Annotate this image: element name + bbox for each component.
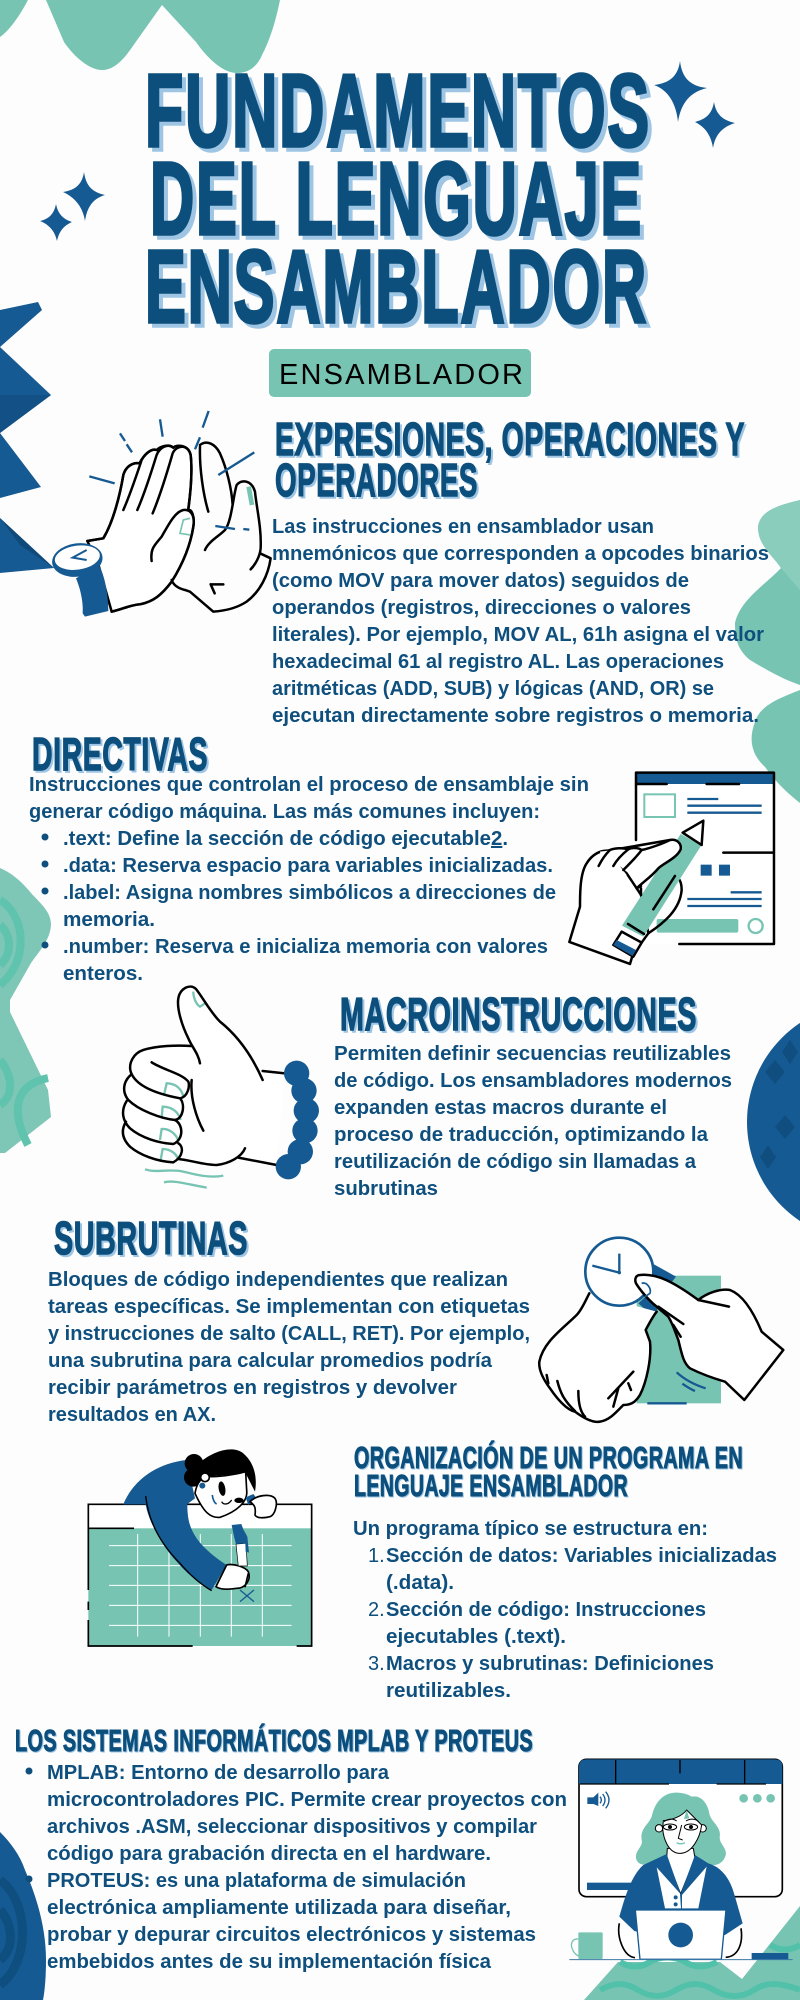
text block: organizacion: 1. — [368, 1545, 385, 1567]
icon: person marking calendar — [88, 1449, 312, 1646]
text block: subrutinas — [48, 1269, 530, 1426]
text block: mplab y proteus: embebidos antes de su implementación física — [47, 1951, 492, 1973]
text block: organizacion: (.data). — [386, 1572, 454, 1594]
heading: expresiones: OPERADORES — [275, 454, 478, 506]
decorative shape: bottom left blue — [0, 1832, 46, 2000]
title — [145, 53, 651, 344]
panel: mplab y proteus — [15, 1723, 793, 1973]
text block: expresiones: hexadecimal 61 al registro AL. Las operaciones — [272, 651, 724, 673]
decorative blob: top teal — [0, 0, 280, 73]
text block: expresiones: mnemónicos que corresponden a opcodes binarios — [272, 543, 769, 565]
badge: ensamblador: ENSAMBLADOR — [279, 359, 523, 391]
text block: expresiones: literales). Por ejemplo, MOV AL, 61h asigna el valor — [272, 624, 764, 646]
text block: mplab y proteus — [26, 1762, 567, 1973]
text block: directivas: Instrucciones que controlan el proceso de ensamblaje sin — [29, 774, 589, 796]
text block: subrutinas: recibir parámetros en registros y devolver — [48, 1377, 457, 1399]
text block: mplab y proteus: código para grabación directa en el hardware. — [47, 1843, 491, 1865]
heading: directivas: DIRECTIVAS — [32, 728, 208, 780]
icon: hand with pencil on document — [569, 773, 774, 964]
panel: subrutinas — [48, 1212, 783, 1426]
text block: directivas: generar código máquina. Las más comunes incluyen: — [29, 801, 540, 823]
text block: directivas: .text: Define la sección de código ejecutable 2. — [63, 828, 508, 850]
heading: organizacion: LENGUAJE ENSAMBLADOR — [354, 1468, 628, 1503]
text block: subrutinas: Bloques de código independientes que realizan — [48, 1269, 508, 1291]
text block: directivas — [29, 774, 589, 985]
text block: mplab y proteus: electrónica ampliamente utilizada para diseñar, — [47, 1897, 511, 1919]
icon: thumbs up — [123, 987, 319, 1188]
text block: subrutinas: tareas específicas. Se implementan con etiquetas — [48, 1296, 530, 1318]
heading: organizacion — [354, 1439, 743, 1503]
text block: subrutinas: resultados en AX. — [48, 1404, 216, 1426]
icon: video call window — [569, 1759, 793, 1960]
text block: mplab y proteus: microcontroladores PIC. Permite crear proyectos con — [47, 1789, 567, 1811]
text block: organizacion: Sección de código: Instrucciones — [386, 1599, 706, 1621]
panel: expresiones — [50, 411, 769, 727]
text block: expresiones: aritméticas (ADD, SUB) y lógicas (AND, OR) se — [272, 678, 714, 700]
decorative circle: right blue — [747, 1003, 800, 1241]
text block: expresiones: Las instrucciones en ensamblador usan — [272, 516, 654, 538]
decorative shape: bottom right teal — [584, 1906, 800, 2000]
text block: organizacion: ejecutables (.text). — [386, 1626, 566, 1648]
text block: mplab y proteus: probar y depurar circuitos electrónicos y sistemas — [47, 1924, 536, 1946]
decorative blob: right teal — [735, 500, 800, 803]
text block: organizacion: Un programa típico se estructura en: — [353, 1518, 708, 1540]
heading: expresiones — [275, 413, 745, 506]
text block: organizacion: 3. — [368, 1653, 385, 1675]
text block: organizacion: Sección de datos: Variables inicializadas — [386, 1545, 777, 1567]
text block: subrutinas: una subrutina para calcular promedios podría — [48, 1350, 493, 1372]
decorative blob: left teal — [0, 868, 51, 1153]
heading: mplab y proteus: LOS SISTEMAS INFORMÁTICOS MPLAB Y PROTEUS — [15, 1723, 533, 1758]
text block: directivas: .data: Reserva espacio para variables inicializadas. — [63, 855, 553, 877]
text block: expresiones: (como MOV para mover datos) seguidos de — [272, 570, 689, 592]
text block: organizacion: reutilizables. — [386, 1680, 511, 1702]
panel: macroinstrucciones — [123, 987, 732, 1200]
icon: wrist watch and hands — [539, 1238, 783, 1422]
text block: macroinstrucciones: de código. Los ensambladores modernos — [334, 1070, 732, 1092]
text block: expresiones — [272, 516, 769, 727]
icon: high five hands — [50, 411, 271, 617]
text block: organizacion: 2. — [368, 1599, 385, 1621]
text block: macroinstrucciones — [334, 1043, 732, 1200]
text block: mplab y proteus: MPLAB: Entorno de desarrollo para — [47, 1762, 390, 1784]
text block: subrutinas: y instrucciones de salto (CALL, RET). Por ejemplo, — [48, 1323, 530, 1345]
text block: organizacion: Macros y subrutinas: Definiciones — [386, 1653, 714, 1675]
icon: sparkles top right — [654, 61, 735, 148]
text block: directivas: .label: Asigna nombres simbólicos a direcciones de — [63, 882, 556, 904]
text block: macroinstrucciones: Permiten definir secuencias reutilizables — [334, 1043, 731, 1065]
text block: mplab y proteus: archivos .ASM, seleccionar dispositivos y compilar — [47, 1816, 537, 1838]
text block: macroinstrucciones: proceso de traducción, optimizando la — [334, 1124, 709, 1146]
decorative shape: left blue star — [0, 302, 54, 573]
text block: directivas: enteros. — [63, 963, 143, 985]
text block: macroinstrucciones: reutilización de código sin llamadas a — [334, 1151, 697, 1173]
text block: directivas: memoria. — [63, 909, 155, 931]
heading: subrutinas: SUBRUTINAS — [54, 1212, 248, 1264]
text block: macroinstrucciones: expanden estas macros durante el — [334, 1097, 667, 1119]
badge: ensamblador — [269, 349, 531, 397]
text block: directivas: .number: Reserva e inicializa memoria con valores — [63, 936, 548, 958]
text block: organizacion — [353, 1518, 777, 1702]
text block: macroinstrucciones: subrutinas — [334, 1178, 438, 1200]
panel: organizacion — [88, 1439, 777, 1702]
icon: sparkles left — [40, 172, 105, 241]
panel: directivas — [29, 728, 774, 985]
text block: mplab y proteus: PROTEUS: es una plataforma de simulación — [47, 1870, 466, 1892]
text block: expresiones: ejecutan directamente sobre registros o memoria. — [272, 705, 759, 727]
text block: expresiones: operandos (registros, direcciones o valores — [272, 597, 691, 619]
